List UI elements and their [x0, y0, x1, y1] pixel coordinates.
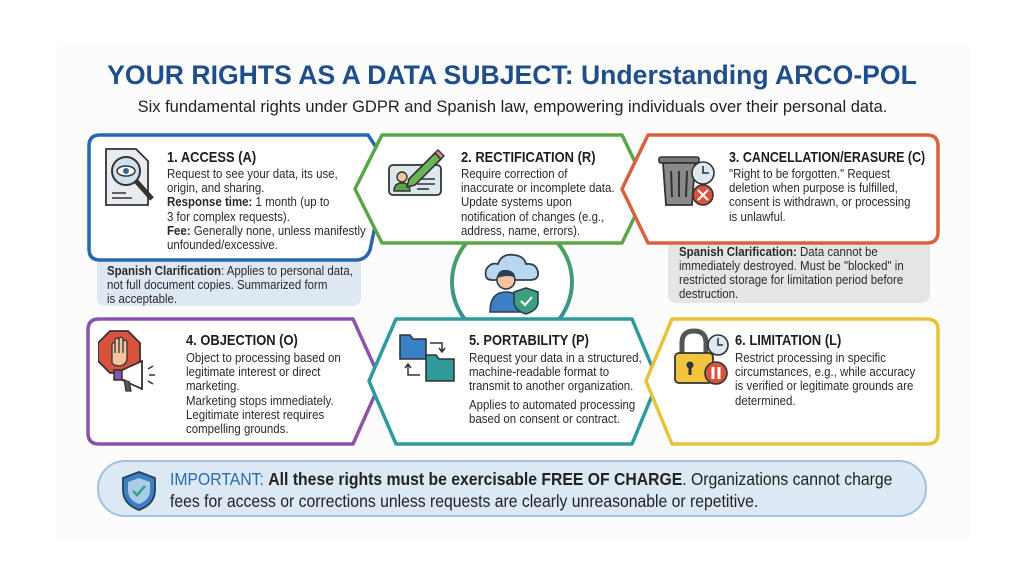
panel 4: objection [98, 330, 341, 436]
icon: stop hand with megaphone [98, 330, 155, 392]
clarification 3: restricted storage for limitation period before [679, 273, 903, 287]
body text: Marketing stops immediately. [186, 394, 334, 408]
body text: Update systems upon [461, 195, 572, 209]
clarification 3: immediately destroyed. Must be "blocked" in [679, 259, 904, 273]
icon: padlock with clock and pause [674, 328, 729, 385]
clarification box 1 [97, 256, 361, 306]
body text: 3 for complex requests). [167, 210, 290, 224]
icon: folders with arrows [399, 334, 455, 382]
icon: shield [122, 471, 156, 511]
body text: origin, and sharing. [167, 181, 264, 195]
clarification 1 [107, 264, 353, 306]
body text [186, 351, 341, 436]
icon: trash can with clock and x [658, 156, 715, 206]
panel 1 [89, 135, 388, 260]
clarification 3: destruction. [679, 287, 738, 301]
body text: deletion when purpose is fulfilled, [729, 181, 898, 195]
panel 3 [622, 135, 938, 243]
subtitle: Six fundamental rights under GDPR and Spanish law, empowering individuals over their personal data. [137, 97, 887, 116]
panel 4 [88, 319, 381, 444]
body text: Legitimate interest requires [186, 408, 324, 422]
body text: Applies to automated processing [469, 398, 635, 412]
panel 5: portability [399, 332, 642, 426]
heading: 5. PORTABILITY (P) [469, 332, 589, 349]
body text: determined. [735, 394, 796, 408]
body text: Require correction of [461, 167, 567, 181]
body text: marketing. [186, 379, 240, 393]
panel 2 [355, 135, 648, 243]
body text: notification of changes (e.g., [461, 210, 604, 224]
panel 6 [646, 319, 938, 444]
body text: "Right to be forgotten." Request [729, 167, 890, 181]
heading: 2. RECTIFICATION (R) [461, 149, 595, 166]
center icon: person with cloud and shield [484, 254, 539, 315]
center ring [452, 222, 572, 342]
banner [98, 461, 926, 516]
heading: 6. LIMITATION (L) [735, 332, 841, 349]
banner text [170, 469, 892, 511]
clarification 3: Spanish Clarification: Data cannot be [679, 245, 878, 259]
clarification box 3 [668, 240, 930, 303]
body text: circumstances, e.g., while accuracy [735, 365, 915, 379]
title: YOUR RIGHTS AS A DATA SUBJECT: Understanding ARCO-POL [107, 60, 917, 90]
body text: Fee: Generally none, unless manifestly [167, 224, 366, 238]
body text: Object to processing based on [186, 351, 341, 365]
body text [735, 351, 916, 408]
body text: compelling grounds. [186, 422, 289, 436]
panel 3: cancellation [658, 149, 925, 224]
body text: unfounded/excessive. [167, 238, 278, 252]
clarification 1: not full document copies. Summarized form [107, 278, 327, 292]
body text [461, 167, 615, 238]
background card [55, 45, 970, 540]
body text [167, 167, 366, 252]
banner text: fees for access or corrections unless requests are clearly unreasonable or repetitive. [170, 491, 758, 511]
heading: 3. CANCELLATION/ERASURE (C) [729, 149, 925, 166]
body text: address, name, errors). [461, 224, 580, 238]
panel 2: rectification [388, 149, 615, 238]
heading: 4. OBJECTION (O) [186, 332, 298, 349]
body text: is verified or legitimate grounds are [735, 379, 913, 393]
body text [469, 351, 642, 426]
panel 5 [369, 319, 658, 444]
clarification 3 [679, 245, 904, 301]
clarification 1: is acceptable. [107, 292, 177, 306]
banner: important [122, 469, 892, 511]
banner text: IMPORTANT: All these rights must be exercisable FREE OF CHARGE. Organizations cannot charge [170, 469, 892, 489]
body text: machine-readable format to [469, 365, 609, 379]
body text: Response time: 1 month (up to [167, 195, 329, 209]
body text: is unlawful. [729, 210, 786, 224]
clarification 1: Spanish Clarification: Applies to personal data, [107, 264, 353, 278]
body text [729, 167, 911, 224]
icon: id card with pencil [388, 149, 445, 196]
panel 6: limitation [674, 328, 916, 408]
body text: consent is withdrawn, or processing [729, 195, 911, 209]
heading: 1. ACCESS (A) [167, 149, 256, 166]
body text: Restrict processing in specific [735, 351, 886, 365]
body text: Request your data in a structured, [469, 351, 642, 365]
body text: transmit to another organization. [469, 379, 633, 393]
body text: inaccurate or incomplete data. [461, 181, 615, 195]
body text: based on consent or contract. [469, 412, 620, 426]
body text: legitimate interest or direct [186, 365, 320, 379]
icon: document with magnifier [105, 148, 154, 206]
body text: Request to see your data, its use, [167, 167, 338, 181]
panel 1: access [105, 148, 366, 252]
